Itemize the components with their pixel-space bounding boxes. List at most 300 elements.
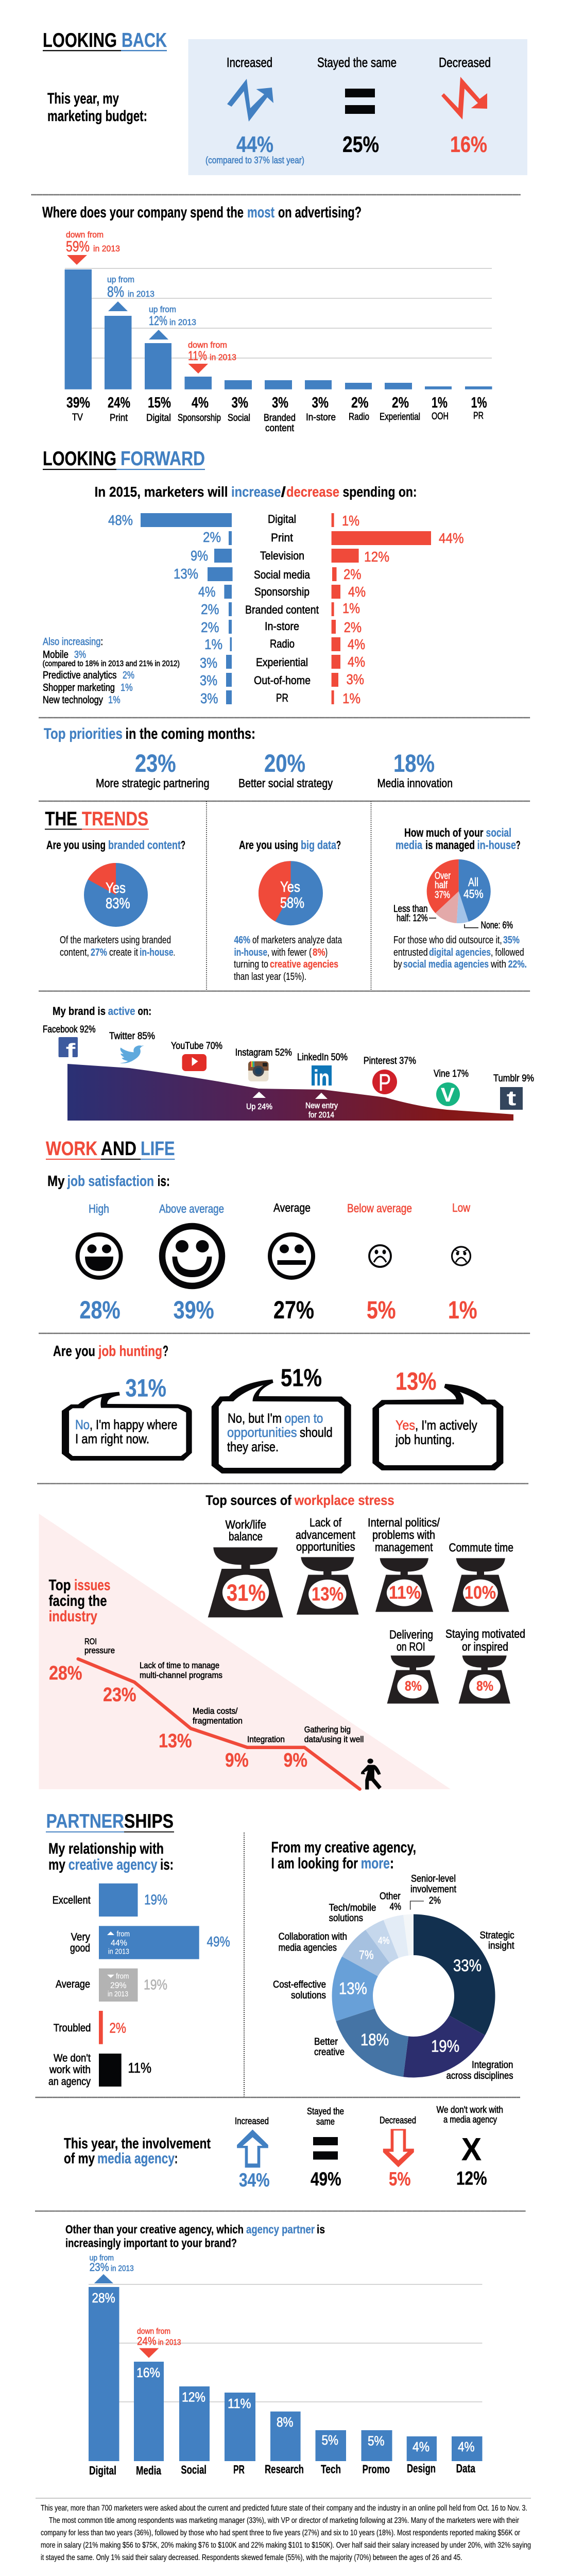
issue values: 9% <box>283 1750 307 1771</box>
slice values <box>339 1936 482 2056</box>
pie chart: branded content: Yes <box>106 880 126 896</box>
issue values: 9% <box>225 1750 249 1771</box>
social: twitter <box>109 1031 155 1063</box>
bar labels: PR <box>233 2463 245 2476</box>
stress scale: internal politics 11% <box>368 1516 440 1612</box>
pie chart: social media management: half <box>435 880 448 891</box>
text block: also increasing: New technology <box>43 694 103 706</box>
category labels: Radio <box>270 637 295 650</box>
text block: outsource note: 22%. <box>508 959 527 970</box>
row: average: from <box>116 1972 129 1981</box>
job satisfaction: high: 28% <box>79 1297 121 1324</box>
heading: work and life <box>46 1138 175 1160</box>
speech bubble: no happy 31%: 31% <box>126 1375 166 1402</box>
heading: my relationship with creative agency <box>48 1840 174 1873</box>
social: tumblr: t <box>507 1087 516 1110</box>
slice labels: media agencies <box>279 1943 337 1954</box>
text: this year my marketing budget: This year, my <box>47 90 119 107</box>
slice labels: creative <box>314 2047 345 2058</box>
bar labels: content <box>265 423 295 434</box>
slice values: 19% <box>431 2037 459 2056</box>
text block: outsource note: For those who did outsource it, <box>393 935 502 946</box>
heading: my job satisfaction: job satisfaction <box>67 1173 154 1190</box>
social: instagram: Instagram 52% <box>235 1047 292 1058</box>
text: this year my marketing budget: marketing budget: <box>47 108 147 125</box>
social: facebook <box>43 1024 96 1062</box>
text block: big data note: 8% <box>313 947 325 958</box>
text block: also increasing <box>43 636 180 706</box>
heading: other than your creative agency: agency partner <box>246 2223 315 2236</box>
callout: digital up from 23%: in 2013 <box>111 2264 134 2273</box>
bar labels: Design <box>407 2462 436 2475</box>
decrease values: 12% <box>364 549 389 565</box>
area chart: social network activity <box>67 1064 513 1121</box>
category labels: Television <box>260 549 304 562</box>
bar values: 11% <box>228 2396 251 2411</box>
social: tumblr <box>493 1073 534 1110</box>
slice labels: 2% <box>429 1895 441 1906</box>
stats: top priorities: 23% <box>135 750 176 777</box>
social: tumblr: Tumblr 9% <box>493 1073 534 1084</box>
category labels: Social media <box>254 568 311 581</box>
media agency: decreased 5%: Decreased <box>380 2115 416 2126</box>
decrease values: 44% <box>439 530 463 546</box>
bar values: 28% <box>92 2290 115 2306</box>
heading: my brand is active on: active <box>108 1005 135 1018</box>
stress scale: delivering on ROI 8% <box>387 1628 439 1704</box>
text block: big data note: in-house <box>234 947 267 958</box>
marker: new entry for 2014: New entry <box>305 1101 338 1110</box>
bar labels <box>72 411 484 434</box>
increase values: 3% <box>200 655 217 671</box>
media agency: decreased 5%: 5% <box>389 2168 411 2190</box>
heading: where does your company spend: Where does your company spend the <box>42 204 244 221</box>
percentages: 16% <box>450 132 487 157</box>
heading: involvement of media agency <box>64 2136 211 2167</box>
row: average: 29% <box>110 1980 127 1990</box>
row: troubled <box>54 2011 126 2044</box>
row: troubled: 2% <box>109 2020 126 2036</box>
social: linkedin: LinkedIn 50% <box>297 1052 348 1063</box>
media agency: increased 34% <box>235 2116 270 2191</box>
heading: from my creative agency: more <box>361 1855 390 1872</box>
bar values: 1% <box>471 395 487 411</box>
text block: big data note: 46% <box>234 935 250 946</box>
callout: sponsorship down from 11% <box>188 340 236 374</box>
heading: from my creative agency: I am looking for <box>271 1855 358 1872</box>
text block: branded content note: Of the marketers using branded <box>60 935 171 946</box>
heading: top sources of workplace stress: Top sources of <box>205 1493 292 1508</box>
bar labels: In-store <box>306 412 336 423</box>
pie chart: social media management: half: 12% <box>397 913 428 924</box>
increase values: 9% <box>191 548 208 564</box>
bar labels: Sponsorship <box>178 413 221 423</box>
heading: my brand is active on: My brand is <box>53 1005 106 1018</box>
media agency: increased 34%: Increased <box>235 2116 269 2126</box>
bar values: 3% <box>272 395 288 411</box>
heading: top issues: facing the <box>49 1592 107 1609</box>
column labels: Stayed the same <box>317 55 397 70</box>
line chart: descending issues <box>78 1659 360 1789</box>
bar values: 4% <box>192 395 209 411</box>
stats: top priorities: 20% <box>264 750 305 777</box>
callout: digital up from 23%: up from <box>90 2254 114 2263</box>
footer: methodology note <box>41 2504 531 2562</box>
text block: big data note: , with fewer ( <box>267 947 312 958</box>
stress scale: internal politics 11%: problems with <box>372 1528 435 1541</box>
heading: other than your creative agency <box>65 2223 325 2250</box>
panel: big data: ? <box>336 838 341 852</box>
pie chart: big data <box>259 861 323 925</box>
callout: digital up from 12%: up from <box>149 304 176 314</box>
stress scale: internal politics 11%: 11% <box>389 1583 421 1603</box>
row: no agency: an agency <box>48 2076 91 2088</box>
stress scale: delivering on ROI 8%: 8% <box>405 1679 422 1694</box>
speech bubble: open to opportunities 51%: should <box>300 1425 333 1440</box>
stats: top priorities: More strategic partnering <box>96 776 209 790</box>
text block: branded content note: content, <box>60 947 89 958</box>
media agency: stayed the same 49% <box>307 2106 344 2190</box>
heading: my relationship with creative agency: My relationship with <box>48 1840 164 1857</box>
decrease bars <box>332 513 431 704</box>
text block: also increasing: Shopper marketing <box>43 682 115 693</box>
social: instagram <box>235 1047 292 1081</box>
row: average <box>56 1969 167 2002</box>
job satisfaction: below average <box>347 1201 412 1324</box>
row: very good: 44% <box>111 1938 127 1948</box>
pie chart: branded content <box>84 863 148 927</box>
text block: branded content note: in-house <box>140 947 174 958</box>
heading: other than your creative agency: Other than your creative agency, which <box>65 2223 244 2236</box>
speech bubble: yes actively 13%: Yes <box>396 1417 415 1433</box>
column labels: Increased <box>227 55 272 70</box>
pie chart: social media management: All <box>468 875 478 889</box>
bar values: 5% <box>321 2432 338 2448</box>
panel: social media in-house: media <box>396 838 422 852</box>
stress scale: work life balance 31%: 31% <box>227 1580 266 1606</box>
callout: TV down from 59% <box>66 230 120 265</box>
slice values: 13% <box>339 1979 367 1998</box>
media agency: stayed the same 49%: Stayed the <box>307 2106 344 2116</box>
panel: big data: big data <box>301 838 336 852</box>
media agency: no media agency 12%: We don't work with <box>437 2105 503 2115</box>
icon: equals <box>345 89 375 114</box>
callout: media down from 24%: down from <box>137 2327 170 2336</box>
slice labels: Other <box>380 1891 401 1902</box>
speech bubble: no happy 31% <box>62 1375 192 1461</box>
row: average: in 2013 <box>108 1990 128 1998</box>
text block: outsource note: , followed <box>491 947 524 958</box>
stress scale: lack of advancement 13%: advancement <box>296 1528 356 1541</box>
text block: big data note: ) <box>325 947 328 958</box>
stress scale: lack of advancement 13%: opportunities <box>296 1540 355 1553</box>
heading: where does your company spend: most <box>247 204 274 221</box>
stress scale: work life balance 31%: balance <box>229 1530 263 1543</box>
bar labels: Digital <box>89 2464 116 2477</box>
stress scale: work life balance 31%: Work/life <box>226 1518 266 1531</box>
bar labels: Digital <box>146 413 171 423</box>
heading: in 2015 marketers will increase or decrease: / <box>281 484 286 500</box>
increase values: 13% <box>174 566 198 582</box>
speech bubble: open to opportunities 51% <box>212 1365 351 1473</box>
slice labels: insight <box>488 1941 514 1952</box>
bar values: 12% <box>182 2389 205 2405</box>
text block: branded content note <box>60 935 175 958</box>
bar labels: Branded <box>264 413 296 423</box>
increase bars <box>141 513 233 704</box>
bar values: 3% <box>232 395 248 411</box>
decrease values: 2% <box>344 619 362 635</box>
speech bubble: open to opportunities 51%: No, but I'm <box>228 1411 282 1426</box>
callout: sponsorship down from 11%: 11% <box>188 349 207 363</box>
text block: also increasing: Predictive analytics <box>43 670 116 681</box>
issue labels: ROI <box>84 1637 97 1647</box>
heading: in 2015 marketers will increase or decrease: decrease <box>286 484 339 500</box>
stats: top priorities <box>96 750 453 790</box>
job satisfaction: below average: 5% <box>367 1297 396 1324</box>
speech bubble: no happy 31%: I am right now. <box>75 1431 149 1447</box>
callout: TV down from 59%: 59% <box>66 239 90 255</box>
decrease values: 1% <box>342 690 360 706</box>
slice labels: Cost-effective <box>273 1979 326 1990</box>
slice labels: solutions <box>291 1990 326 2001</box>
increase values: 2% <box>201 619 219 635</box>
row: very good <box>70 1926 230 1959</box>
media agency: stayed the same 49%: 49% <box>311 2168 341 2190</box>
heading: involvement of media agency: : <box>175 2150 178 2167</box>
panel: big data: Are you using <box>239 838 298 852</box>
speech bubble: no happy 31%: No <box>75 1417 90 1432</box>
panel: branded content: ? <box>181 838 185 852</box>
heading: top priorities: Top priorities <box>44 725 123 742</box>
job satisfaction: low <box>448 1201 477 1324</box>
stress scale: staying motivated 8%: Staying motivated <box>445 1627 525 1640</box>
heading: where does your company spend: on advertising? <box>278 204 362 221</box>
callout: sponsorship down from 11%: down from <box>188 340 227 350</box>
increase values <box>108 512 222 706</box>
panel: top issues facing the industry <box>39 1514 451 1789</box>
slice values: 7% <box>359 1948 374 1962</box>
social: vine: V <box>441 1084 455 1106</box>
callout: digital up from 12% <box>149 304 196 340</box>
category labels: Branded content <box>245 603 319 616</box>
heading: looking forward <box>43 448 205 470</box>
text block: outsource note: by <box>393 959 402 970</box>
issue labels: data/using it well <box>304 1735 364 1744</box>
social: youtube: YouTube 70% <box>171 1041 222 1052</box>
note: compared to last year: (compared to 37% last year) <box>205 155 304 165</box>
callout: TV down from 59%: down from <box>66 230 104 240</box>
row: very good: from <box>116 1930 130 1939</box>
job satisfaction: average: 27% <box>273 1297 314 1324</box>
job satisfaction: average: Average <box>273 1201 311 1214</box>
heading: involvement of media agency: of my <box>64 2150 95 2167</box>
heading: my brand is active on <box>53 1005 151 1018</box>
stress scale: delivering on ROI 8%: Delivering <box>389 1628 433 1641</box>
row: average: Average <box>56 1978 90 1990</box>
row: average: 19% <box>144 1977 167 1993</box>
pie chart: social media management: 37% <box>435 890 450 901</box>
decrease values: 3% <box>346 671 364 687</box>
issue labels: Media costs/ <box>193 1706 238 1716</box>
slice values: 33% <box>453 1956 482 1975</box>
bar values: 2% <box>351 395 369 411</box>
bar chart: advertising spend <box>65 230 492 434</box>
marker: up 24%: Up 24% <box>246 1103 272 1111</box>
issue labels: fragmentation <box>193 1716 243 1726</box>
row: excellent: 19% <box>144 1892 167 1908</box>
job satisfaction: below average: Below average <box>347 1201 412 1215</box>
text block: big data note: turning to <box>234 959 268 970</box>
job satisfaction: high <box>78 1202 121 1324</box>
percentages: 44% <box>236 132 273 157</box>
heading: other than your creative agency: increasingly important to your brand? <box>65 2236 237 2250</box>
slice labels: 4% <box>389 1902 401 1912</box>
text block: also increasing: Also increasing <box>43 636 101 648</box>
job satisfaction: low: 1% <box>448 1297 477 1324</box>
increase values: 3% <box>200 690 218 706</box>
social: facebook: f <box>66 1040 75 1062</box>
slice labels: Strategic <box>480 1930 514 1941</box>
callout: digital up from 12%: in 2013 <box>169 317 196 327</box>
text block: big data note <box>234 935 342 982</box>
media agency: no media agency 12%: X <box>461 2132 482 2167</box>
pie chart: branded content: 83% <box>106 895 130 912</box>
heading: from my creative agency <box>271 1839 416 1872</box>
slice labels: involvement <box>410 1884 457 1895</box>
text block: outsource note: with <box>490 959 506 970</box>
category labels: Digital <box>268 513 296 526</box>
panel: social media in-house <box>393 826 527 970</box>
bar labels: Data <box>456 2462 475 2475</box>
icon: zigzag up arrow <box>227 79 273 122</box>
icon: zigzag down arrow <box>441 77 487 120</box>
pie chart: social media management: Less than <box>393 904 428 914</box>
heading: looking back: BACK <box>122 29 167 52</box>
decrease values: 1% <box>342 600 360 616</box>
bar labels: Experiential <box>380 412 420 422</box>
category labels: PR <box>276 691 288 704</box>
bar values: 2% <box>392 395 409 411</box>
stress scale: internal politics 11%: Internal politics/ <box>368 1516 440 1529</box>
social: linkedin: in <box>314 1065 330 1091</box>
heading: my relationship with creative agency: creative agency <box>68 1856 158 1873</box>
social: linkedin <box>297 1052 348 1091</box>
text block: big data note: than last year (15%). <box>234 971 306 982</box>
pie chart: social media management: Over <box>435 871 451 882</box>
bar values: 24% <box>108 395 130 411</box>
speech bubble: no happy 31%: , I'm happy where <box>90 1417 177 1432</box>
stress scale: delivering on ROI 8%: on ROI <box>397 1640 425 1653</box>
slice labels: solutions <box>329 1913 363 1924</box>
increase values: 1% <box>204 636 222 652</box>
heading: looking back: LOOKING <box>43 29 117 52</box>
bar labels: Promo <box>363 2463 390 2476</box>
decrease values <box>342 513 463 706</box>
icon: walking figure <box>361 1758 382 1789</box>
text block: outsource note: entrusted <box>393 947 428 958</box>
slice labels <box>273 1874 514 2081</box>
heading: the trends: THE <box>45 808 77 830</box>
pie chart: social media management <box>393 859 513 931</box>
media agency: stayed the same 49%: same <box>316 2116 335 2127</box>
decrease values: 2% <box>343 566 362 582</box>
issue labels: multi-channel programs <box>140 1670 222 1680</box>
marker: new entry for 2014 <box>305 1093 338 1120</box>
category labels: In-store <box>265 620 299 633</box>
callout: print up from 8%: up from <box>107 275 134 284</box>
slice values: 4% <box>378 1936 390 1946</box>
stats: top priorities: Media innovation <box>377 776 453 790</box>
heading: top priorities: in the coming months: <box>126 725 255 742</box>
bar values: 4% <box>413 2439 429 2454</box>
job satisfaction: average <box>270 1201 314 1324</box>
speech bubble: yes actively 13%: 13% <box>396 1368 437 1396</box>
heading: work and life: LIFE <box>141 1138 175 1160</box>
heading: are you job hunting: ? <box>163 1343 168 1360</box>
stress scale: work life balance 31% <box>208 1518 283 1617</box>
heading: in 2015 marketers will increase or decrease <box>95 484 417 500</box>
bar values: 15% <box>148 395 171 411</box>
increase values: 2% <box>201 601 219 617</box>
text block: outsource note: digital agencies <box>429 947 491 958</box>
heading: my job satisfaction: is: <box>158 1173 170 1190</box>
row: excellent: Excellent <box>53 1894 91 1906</box>
stats: top priorities: Better social strategy <box>238 776 333 790</box>
bar labels: Radio <box>349 412 369 422</box>
issue labels: Gathering big <box>304 1725 351 1735</box>
job satisfaction: low: Low <box>452 1201 470 1214</box>
callout: print up from 8% <box>107 275 154 311</box>
slice labels: Better <box>314 2037 338 2047</box>
bar chart: agency partners <box>89 2254 482 2477</box>
heading: from my creative agency: : <box>390 1855 394 1872</box>
text block: also increasing: 1% <box>108 694 121 706</box>
decrease values: 4% <box>348 584 366 600</box>
bar values: 3% <box>312 395 329 411</box>
row: very good: in 2013 <box>108 1947 129 1956</box>
panel: marketing budget <box>188 39 527 175</box>
text block: branded content note: . <box>174 947 175 958</box>
panel: social media in-house: in-house <box>477 838 516 852</box>
category labels: Experiential <box>256 656 308 669</box>
bar values: 16% <box>136 2365 160 2380</box>
bar labels: Research <box>265 2463 304 2476</box>
pie chart: big data: Yes <box>280 879 300 895</box>
media agency: increased 34%: 34% <box>239 2170 270 2191</box>
text block: big data note: of marketers analyze data <box>252 935 342 946</box>
heading: top issues <box>49 1577 110 1625</box>
callout: media down from 24% <box>137 2327 181 2358</box>
heading: top issues: Top <box>49 1577 71 1594</box>
panel: branded content: Are you using <box>46 838 106 852</box>
heading: looking forward: LOOKING <box>43 448 116 470</box>
text block: outsource note: social media agencies <box>403 959 489 970</box>
social: youtube <box>171 1041 222 1071</box>
panel: social media in-house: is managed <box>425 838 475 852</box>
text block: also increasing: (compared to 18% in 2013 and 21% in 2012) <box>43 659 180 668</box>
social: facebook: Facebook 92% <box>43 1024 96 1035</box>
heading: top sources of workplace stress <box>205 1493 394 1508</box>
heading: involvement of media agency: This year, the involvement <box>64 2136 211 2152</box>
increase values: 48% <box>108 512 133 528</box>
social: pinterest <box>364 1056 416 1096</box>
bar values: 39% <box>66 395 90 411</box>
bar labels: Tech <box>321 2463 341 2476</box>
row: very good: Very <box>71 1931 90 1943</box>
slice labels: Tech/mobile <box>329 1903 376 1913</box>
heading: top issues: issues <box>74 1577 110 1594</box>
